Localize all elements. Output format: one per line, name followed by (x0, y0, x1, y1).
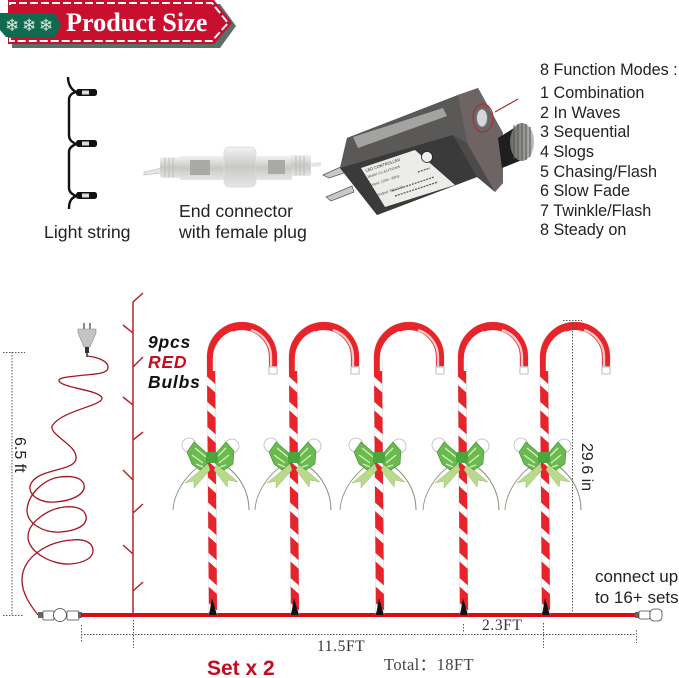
function modes list: 8 Steady on (540, 221, 626, 239)
function modes list: 8 Function Modes : (540, 61, 678, 79)
candy cane 2 (291, 326, 359, 615)
dimension label: 11.5FT: 11.5FT (317, 638, 365, 655)
label: connect up to 16+ sets: to 16+ sets (595, 588, 679, 607)
function modes list: 7 Twinkle/Flash (540, 202, 651, 220)
function modes list: 1 Combination (540, 84, 644, 102)
dimension: lead wire height: 6.5 ft (11, 437, 28, 473)
red highlight and arrow (473, 99, 518, 132)
bulb label: 9pcs RED Bulbs: 9pcs (148, 332, 191, 352)
bow 3 (340, 438, 416, 510)
product label: Model: CL-ELFC0309 (367, 165, 401, 179)
bulb string diagram (123, 293, 143, 615)
product label (361, 150, 455, 207)
dimension line along cable (81, 620, 636, 648)
bow 5 (505, 438, 581, 510)
label: end connector: with female plug (178, 222, 307, 242)
bow 4 (423, 438, 499, 510)
snowflakes: ❄ ❄ ❄ (5, 16, 52, 35)
candy cane 5 (542, 326, 610, 615)
label: end connector: End connector (179, 201, 293, 221)
adapter body (340, 88, 503, 215)
end connector image (144, 147, 321, 187)
function modes list: 2 In Waves (540, 104, 620, 122)
label: connect up to 16+ sets: connect up (595, 567, 678, 586)
bulb label: 9pcs RED Bulbs: Bulbs (148, 372, 201, 392)
banner title: Product Size (66, 8, 207, 37)
red lead wire coil (22, 356, 108, 615)
dimension: cane height (563, 320, 595, 612)
label: light string: Light string (44, 222, 131, 242)
LED controller adapter (323, 88, 534, 215)
light string icon (68, 77, 97, 209)
threaded connector (498, 123, 534, 168)
plug prongs (323, 165, 354, 201)
function modes list: 5 Chasing/Flash (540, 163, 657, 181)
function modes list: 6 Slow Fade (540, 182, 630, 200)
candy cane 4 (460, 326, 528, 615)
bulb label: 9pcs RED Bulbs: RED (148, 352, 187, 372)
bow 1 (173, 438, 249, 510)
product label: LED CONTROLLER (365, 157, 401, 173)
product label: Input: 120V~ 60Hz (371, 174, 400, 187)
dimension label: total: Total：18FT (384, 655, 474, 674)
left connector (38, 608, 82, 622)
bow 2 (255, 438, 331, 510)
power plug (78, 323, 96, 357)
function modes list: 4 Slogs (540, 143, 594, 161)
mode button (476, 109, 488, 127)
banner: Product Size (0, 0, 236, 48)
candy cane 3 (376, 326, 444, 615)
dimension: lead wire height (3, 352, 28, 616)
banner green tag (0, 13, 61, 37)
function modes list: 3 Sequential (540, 123, 630, 141)
main red cable (81, 613, 637, 617)
candy cane 1 (209, 326, 277, 615)
dimension label: 2.3FT: 2.3FT (482, 617, 522, 634)
right connector (635, 609, 662, 621)
product label: Output: 30V 0.3A (377, 185, 404, 197)
dimension: cane height: 29.6 in (578, 443, 595, 491)
